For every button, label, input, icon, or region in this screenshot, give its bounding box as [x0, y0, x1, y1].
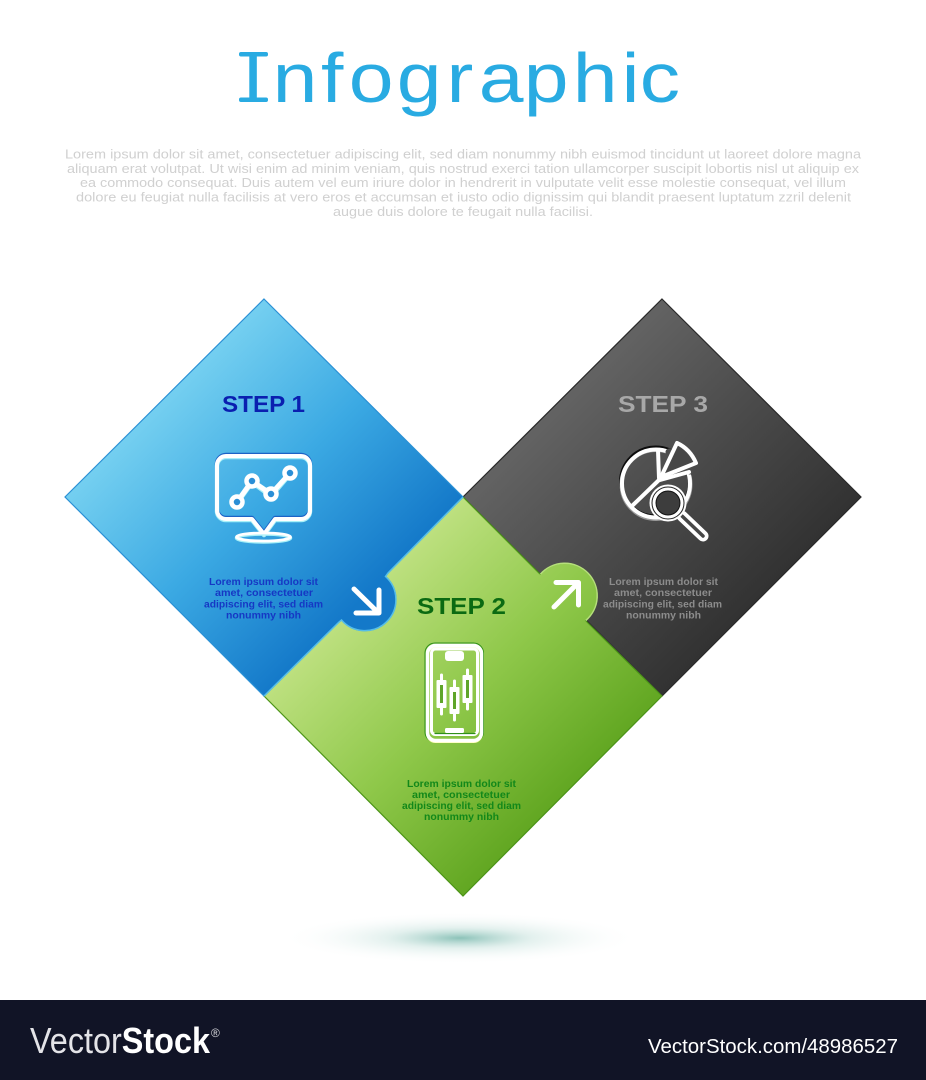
step 3 text: nonummy nibh: [626, 610, 701, 622]
icon: phone with candlesticks: [425, 643, 484, 742]
step 2 text: [402, 779, 521, 823]
intro text block: ea commodo consequat. Duis autem vel eum iriure dolor in hendrerit in vulputate velit esse molestie consequat, vel illum: [80, 176, 846, 190]
footer logo: VectorStock: [30, 1020, 211, 1061]
step 2 text: amet, consectetuer: [412, 790, 510, 801]
icon: chart speech bubble: [217, 455, 310, 542]
footer bar: [0, 1000, 926, 1080]
footer image id: VectorStock.com/48986527: [648, 1036, 898, 1058]
step 3 text: Lorem ipsum dolor sit: [609, 577, 719, 588]
tab highlight: [264, 497, 463, 696]
step 1 text: nonummy nibh: [226, 610, 301, 622]
arrow: up right: [554, 582, 578, 607]
step 1 text: [204, 577, 323, 622]
intro text block: aliquam erat volutpat. Ut wisi enim ad minim veniam, quis nostrud exerci tation ullamcorper suscipit lobortis nisl ut aliquip ex: [67, 162, 860, 176]
step 1 text: amet, consectetuer: [215, 588, 313, 599]
title: Infographic: [242, 39, 680, 117]
step 1 text: Lorem ipsum dolor sit: [209, 577, 319, 588]
arrow: down right: [354, 589, 379, 613]
registered mark: ®: [211, 1026, 220, 1040]
step 3 text: amet, consectetuer: [614, 588, 712, 599]
tab highlight: [540, 563, 597, 620]
panel: step 3: [463, 299, 861, 696]
step 2 text: nonummy nibh: [424, 812, 499, 823]
panel: step 1: [65, 299, 463, 696]
gap in the pie for the lifted slice: [669, 452, 690, 471]
step 3 text: adipiscing elit, sed diam: [603, 600, 722, 610]
step 1 heading: STEP 1: [222, 391, 305, 417]
icon: pie chart with magnifier: [621, 443, 703, 536]
ground shadow: [280, 912, 640, 964]
step 3 text: [603, 577, 722, 622]
step 3 heading: STEP 3: [618, 391, 708, 417]
intro text block: Lorem ipsum dolor sit amet, consectetuer adipiscing elit, sed diam nonummy nibh euismod tincidunt ut laoreet dolore magna: [65, 148, 861, 162]
intro text block: [65, 148, 861, 219]
step 1 text: adipiscing elit, sed diam: [204, 600, 323, 610]
panel: step 2: [264, 497, 662, 896]
step 2 text: Lorem ipsum dolor sit: [407, 779, 517, 790]
step 2 heading: STEP 2: [417, 593, 506, 619]
candlesticks: [436, 670, 472, 720]
intro text block: dolore eu feugiat nulla facilisis at vero eros et accumsan et iusto odio dignissim qui blandit praesent luptatum zzril delenit: [76, 190, 852, 204]
step 2 text: adipiscing elit, sed diam: [402, 801, 521, 812]
intro text block: augue duis dolore te feugait nulla facilisi.: [333, 205, 593, 219]
